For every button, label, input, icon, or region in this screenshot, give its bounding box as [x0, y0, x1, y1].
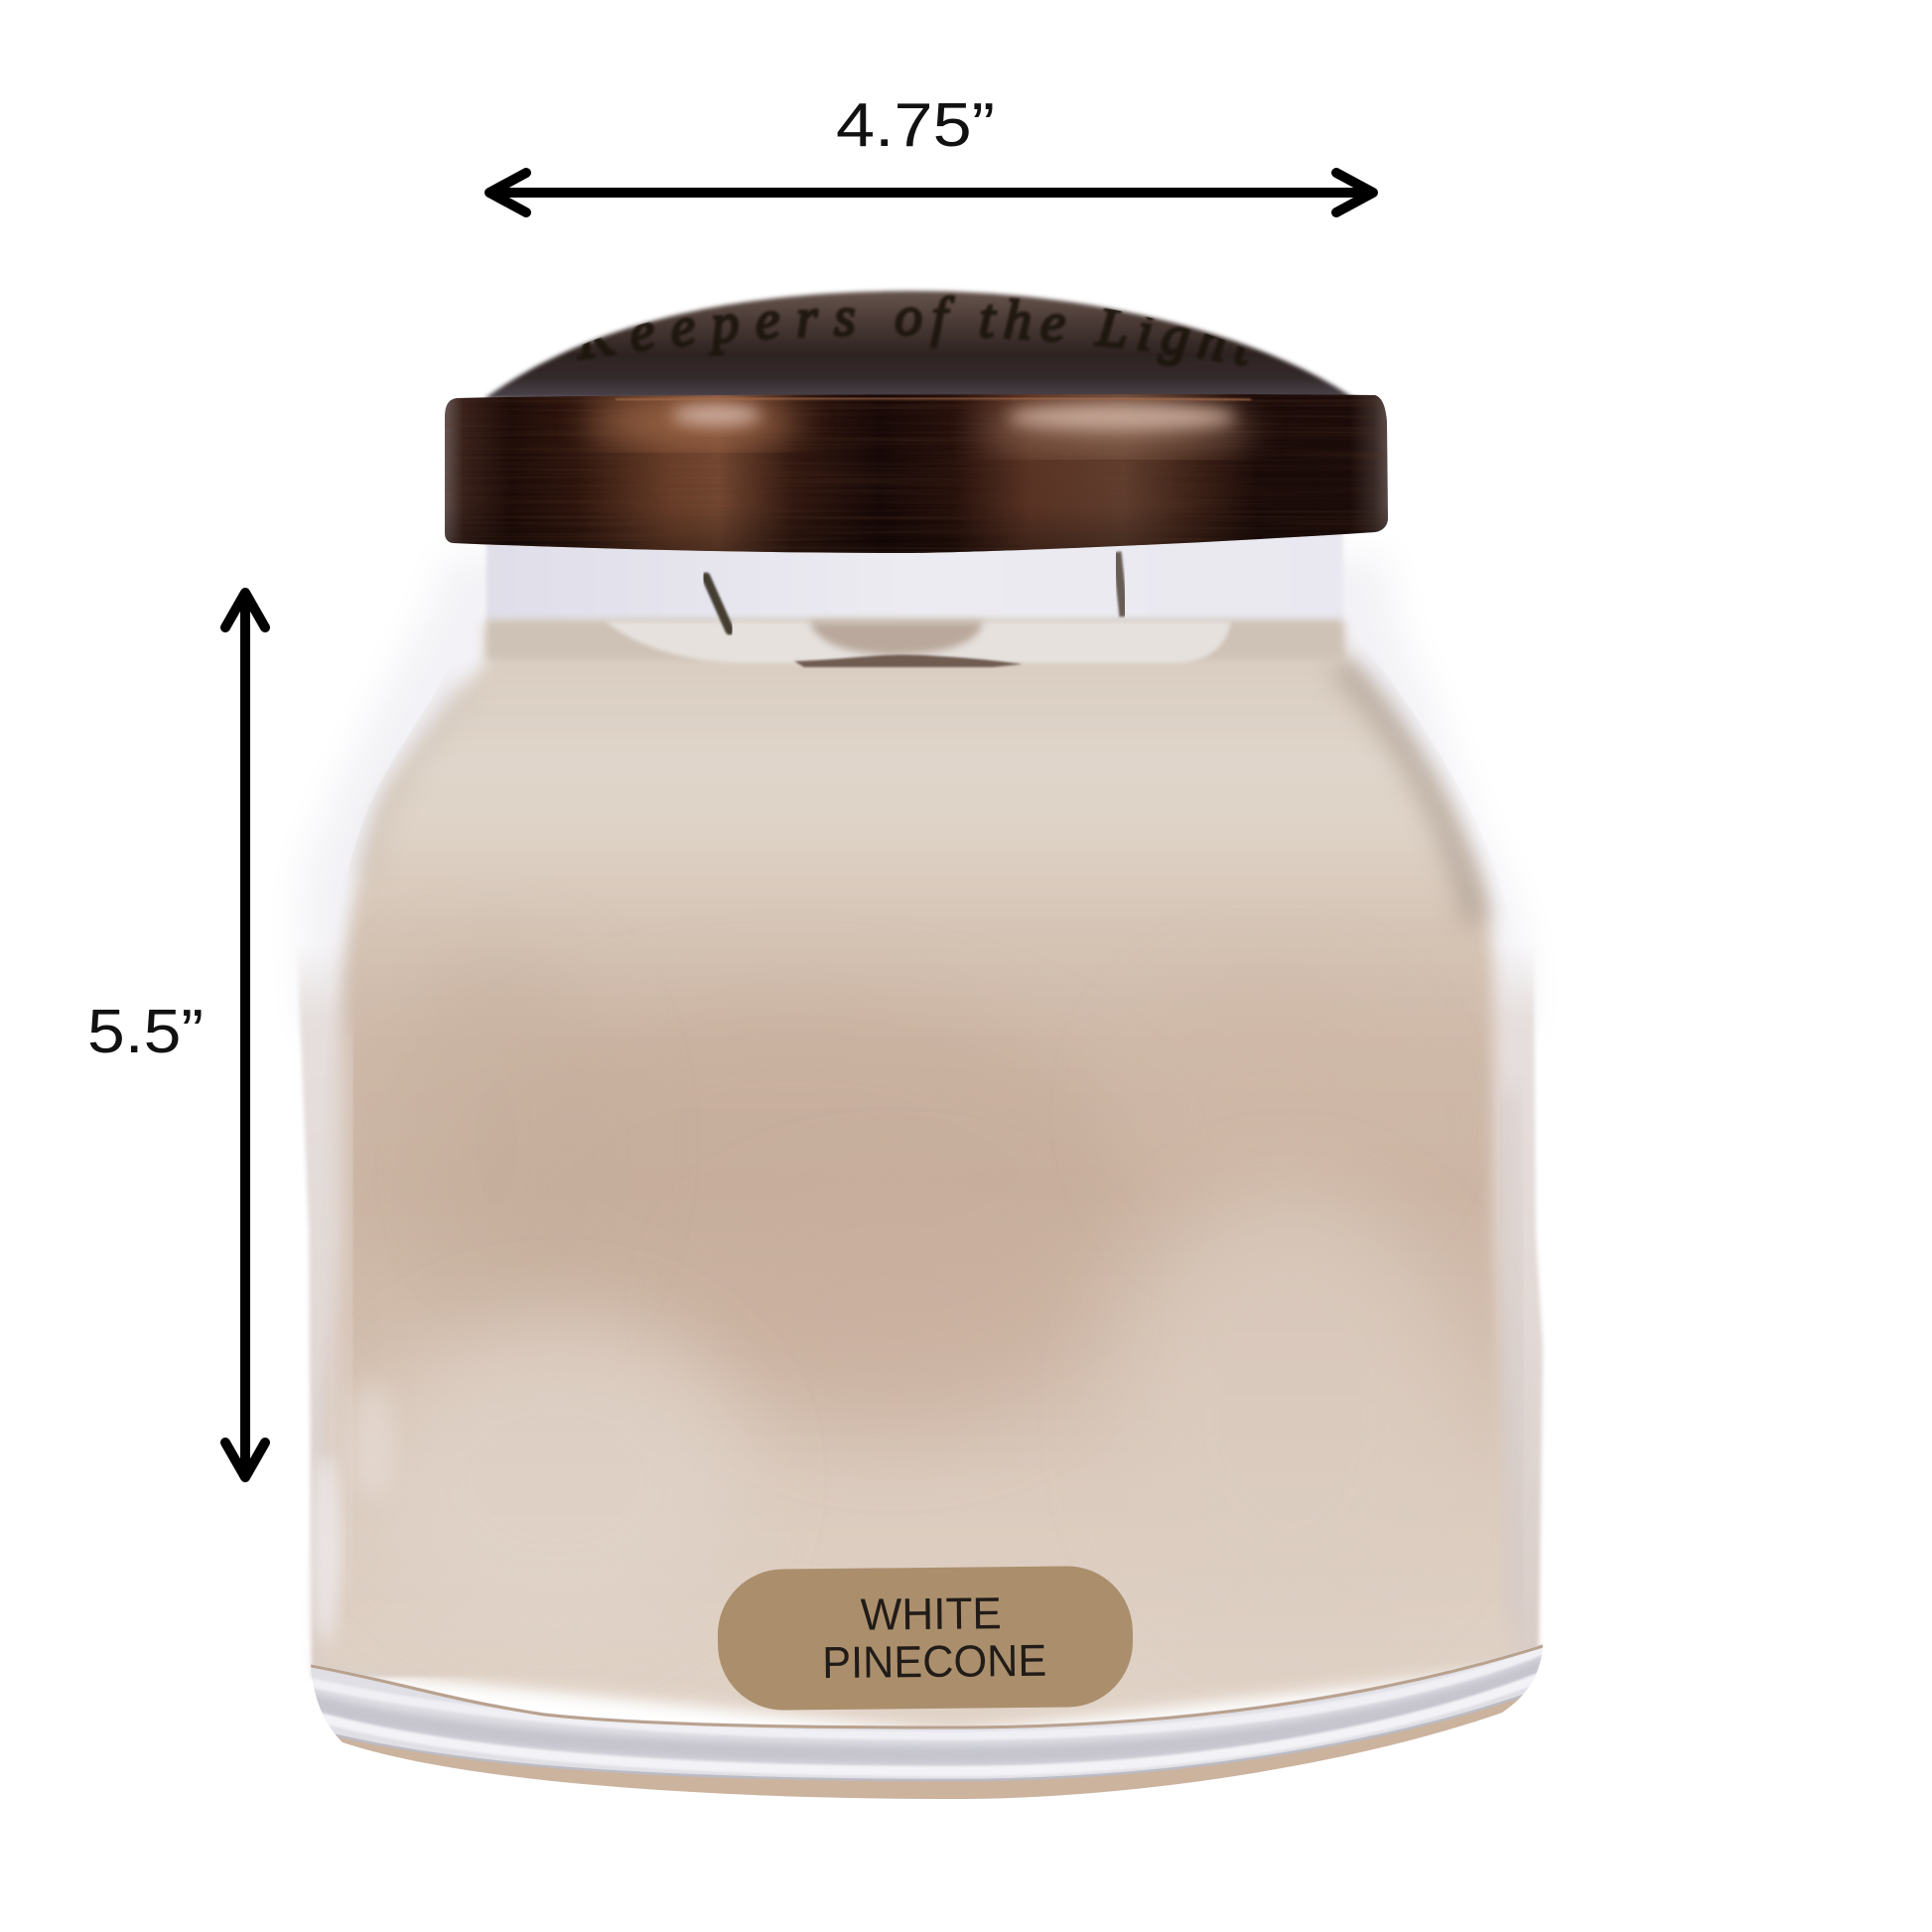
infographic: candle jar with dimensions: [89, 103, 1545, 1799]
base: tan bottom edge: [336, 1696, 1522, 1799]
rim highlight: left: [586, 400, 804, 444]
arrow: vertical double-headed: [225, 593, 265, 1477]
base: thin grey line: [335, 1694, 1523, 1781]
wick: right: [1117, 552, 1124, 617]
candle jar: [257, 288, 1545, 1799]
label text: WHITE: WHITE: [860, 1587, 1002, 1640]
base: tan wax line: [311, 1646, 1543, 1727]
width label: 4.75”: [836, 91, 995, 160]
label shape: [717, 1566, 1134, 1711]
base: mottled grey glass: [298, 1660, 1559, 1755]
base: lower highlight: [298, 1670, 1559, 1771]
melted wax pool: [606, 621, 1231, 663]
width measurement: [489, 91, 1373, 212]
wax surface under the wicks: [486, 620, 1343, 667]
product label: [717, 1566, 1134, 1711]
height measurement: [87, 593, 265, 1477]
lid dome: [483, 291, 1355, 399]
arrow: horizontal double-headed: [489, 173, 1373, 212]
wick: left: [706, 577, 730, 630]
lid embossed text: Keepers of the Light: [577, 294, 1248, 367]
glass base: [311, 1644, 1543, 1799]
glass neck: [486, 526, 1343, 667]
height label: 5.5”: [87, 998, 204, 1066]
lid rim: [445, 394, 1388, 553]
rim highlight: right: [978, 407, 1256, 451]
glass halo: upper shoulders: [301, 556, 1529, 1033]
glass halo: lower body: [297, 943, 1543, 1678]
jar lid: [445, 288, 1388, 553]
wax cloudy shading: [312, 665, 1519, 1643]
base: upper highlight: [298, 1643, 1559, 1735]
label text: PINECONE: PINECONE: [822, 1635, 1047, 1688]
wax body: [318, 625, 1516, 1732]
